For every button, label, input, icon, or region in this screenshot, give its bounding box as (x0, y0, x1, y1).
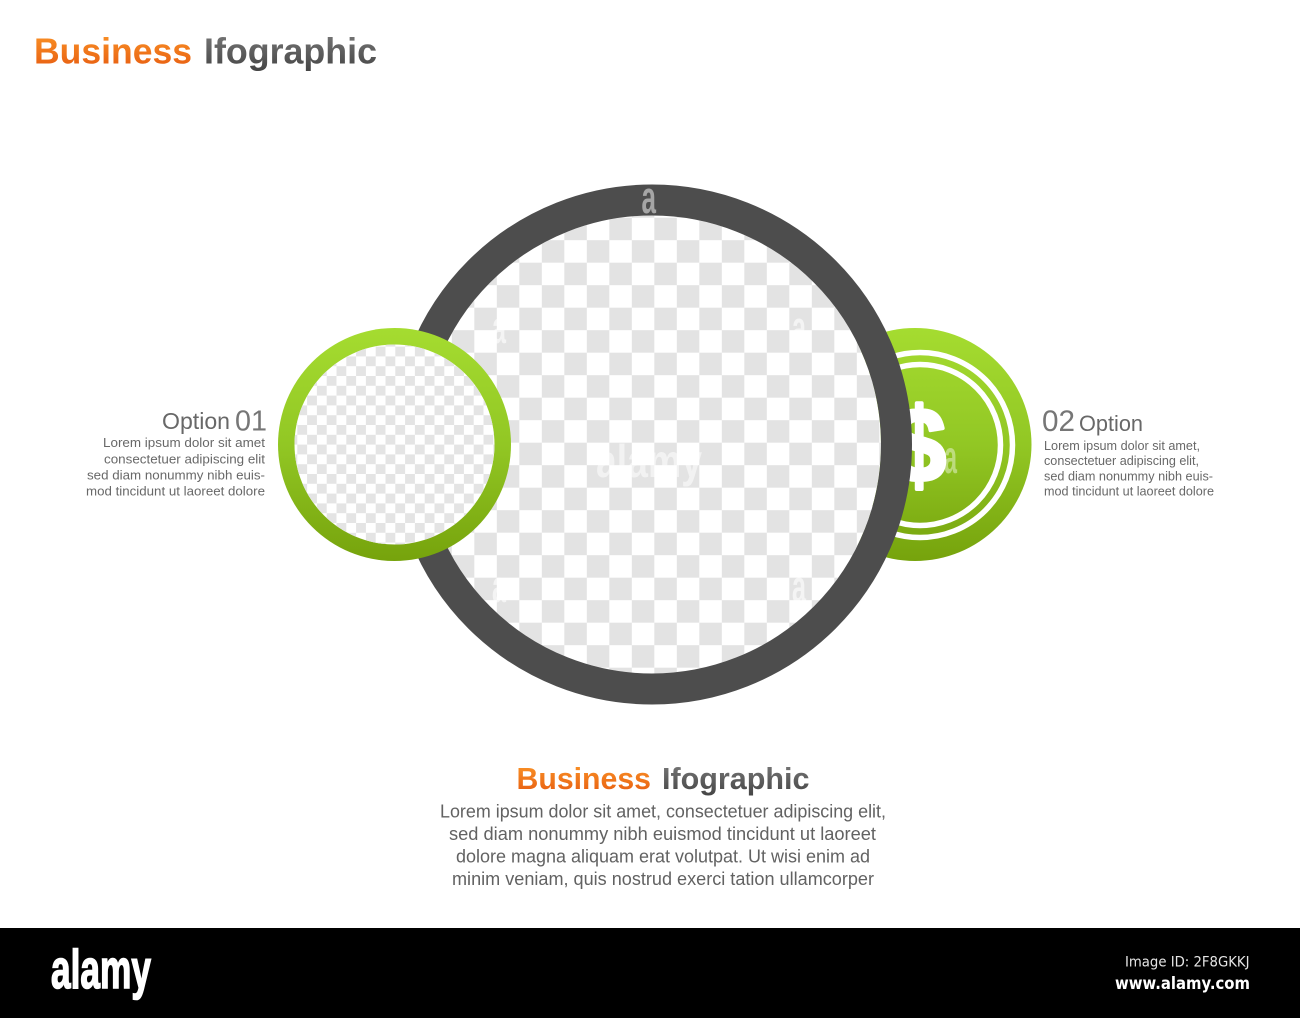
faint watermark letters: a (492, 561, 507, 612)
option 02 description: mod tincidunt ut laoreet dolore (1044, 484, 1214, 498)
faint watermark letters: a (492, 302, 507, 353)
icon: dollar sign: $ (892, 387, 946, 504)
image id: Image ID: 2F8GKKJ (1125, 954, 1250, 970)
bottom heading: Ifographic (662, 762, 810, 796)
option 01 text block (86, 406, 267, 498)
faint watermark letters (492, 302, 807, 612)
option 02 description: sed diam nonummy nibh euis- (1044, 470, 1213, 484)
option 02 heading (1042, 405, 1143, 438)
option 02 coin (798, 328, 1032, 561)
alamy logo: alamy (51, 938, 151, 1000)
option 01 heading (162, 406, 267, 438)
watermark footer bar (0, 928, 1300, 1018)
faint central watermark: alamy (596, 435, 702, 487)
option 02 description (1044, 439, 1214, 498)
option 02 heading: Option (1079, 411, 1143, 436)
faint watermark letters: a (792, 302, 807, 353)
title: Ifographic (204, 30, 377, 71)
option 02 text block (1042, 405, 1214, 498)
option 01 description: mod tincidunt ut laoreet dolore (86, 484, 265, 498)
option 01 description: Lorem ipsum dolor sit amet (103, 435, 265, 450)
bottom heading (516, 762, 810, 796)
bottom description: minim veniam, quis nostrud exerci tation ullamcorper (452, 869, 874, 889)
option 01 heading: 01 (235, 406, 267, 438)
title: Business (34, 30, 192, 71)
option 02 description: consectetuer adipiscing elit, (1044, 454, 1199, 468)
watermark letter on ring: a (642, 172, 657, 223)
option 01 photo placeholder circle (278, 328, 511, 561)
website: www.alamy.com (1115, 974, 1250, 993)
central photo placeholder ring (408, 172, 896, 689)
title (34, 30, 377, 71)
option 02 description: Lorem ipsum dolor sit amet, (1044, 439, 1200, 453)
faint watermark letters: a (792, 561, 807, 612)
option 01 description: sed diam nonummy nibh euis- (87, 468, 265, 482)
option 01 description: consectetuer adipiscing elit (104, 452, 265, 466)
bottom heading: Business (516, 762, 651, 796)
option 01 heading: Option (162, 408, 230, 434)
option 02 heading: 02 (1042, 405, 1075, 438)
bottom description: sed diam nonummy nibh euismod tincidunt ut laoreet (449, 824, 876, 844)
option 01 description (86, 435, 265, 498)
bottom description (440, 802, 886, 889)
bottom description: dolore magna aliquam erat volutpat. Ut wisi enim ad (456, 846, 870, 866)
bottom description: Lorem ipsum dolor sit amet, consectetuer adipiscing elit, (440, 802, 886, 822)
watermark letter on coin: a (944, 431, 957, 483)
